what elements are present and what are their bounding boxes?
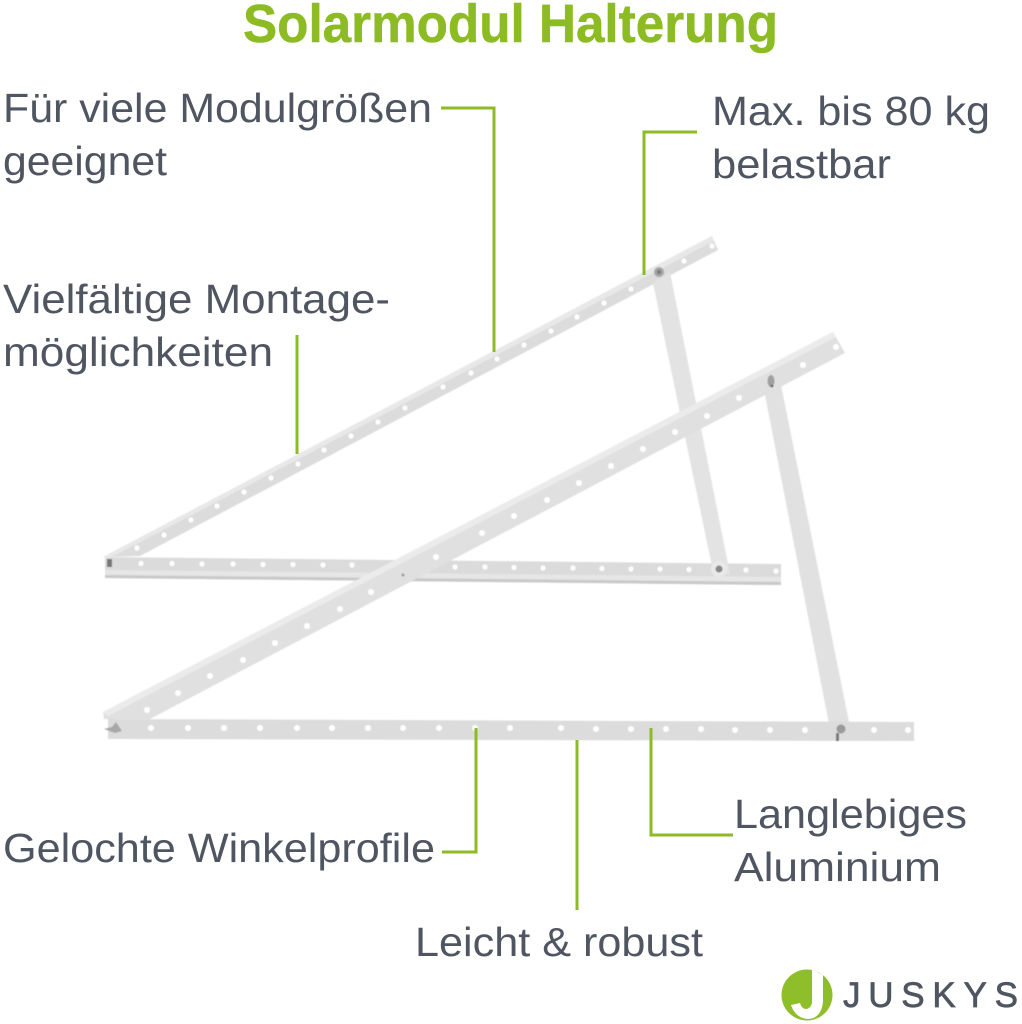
text: light and robust: Leicht & robust bbox=[415, 919, 704, 965]
text: aluminium bbox=[734, 791, 967, 890]
rear sloped rail bbox=[103, 236, 718, 558]
text: mounting options bbox=[3, 276, 390, 375]
leader line: Leicht & robust bbox=[576, 740, 578, 910]
text: perforated profiles: Gelochte Winkelprofile bbox=[3, 825, 435, 871]
text: module sizes bbox=[3, 85, 432, 184]
leader line: Montage bbox=[296, 335, 298, 454]
logo wordmark: JUSKYS bbox=[843, 976, 1018, 1015]
icon: logo mark bbox=[782, 969, 832, 1020]
solar mount bracket illustration bbox=[103, 236, 914, 741]
text: module sizes: geeignet bbox=[3, 138, 168, 184]
front sloped rail bbox=[103, 332, 845, 719]
text: aluminium: Aluminium bbox=[734, 844, 941, 890]
text: load capacity: Max. bis 80 kg bbox=[712, 88, 990, 134]
text: load capacity bbox=[712, 88, 990, 187]
text: load capacity: belastbar bbox=[712, 141, 891, 187]
leader line: Winkelprofile bbox=[442, 728, 476, 852]
front base rail bbox=[108, 719, 914, 741]
leader line: belastbar bbox=[644, 132, 697, 275]
text: module sizes: Für viele Modulgrößen bbox=[3, 85, 432, 131]
text: aluminium: Langlebiges bbox=[734, 791, 967, 837]
logo: Juskys bbox=[782, 969, 1018, 1020]
text: mounting options: möglichkeiten bbox=[3, 329, 273, 375]
mounting bolts bbox=[104, 267, 846, 741]
rear base rail bbox=[105, 557, 781, 585]
leader line: Aluminium bbox=[651, 728, 733, 835]
rear strut bbox=[653, 272, 730, 576]
leader line: Modulgrößen bbox=[441, 108, 494, 352]
front strut bbox=[765, 385, 849, 724]
text: mounting options: Vielfältige Montage- bbox=[3, 276, 390, 322]
